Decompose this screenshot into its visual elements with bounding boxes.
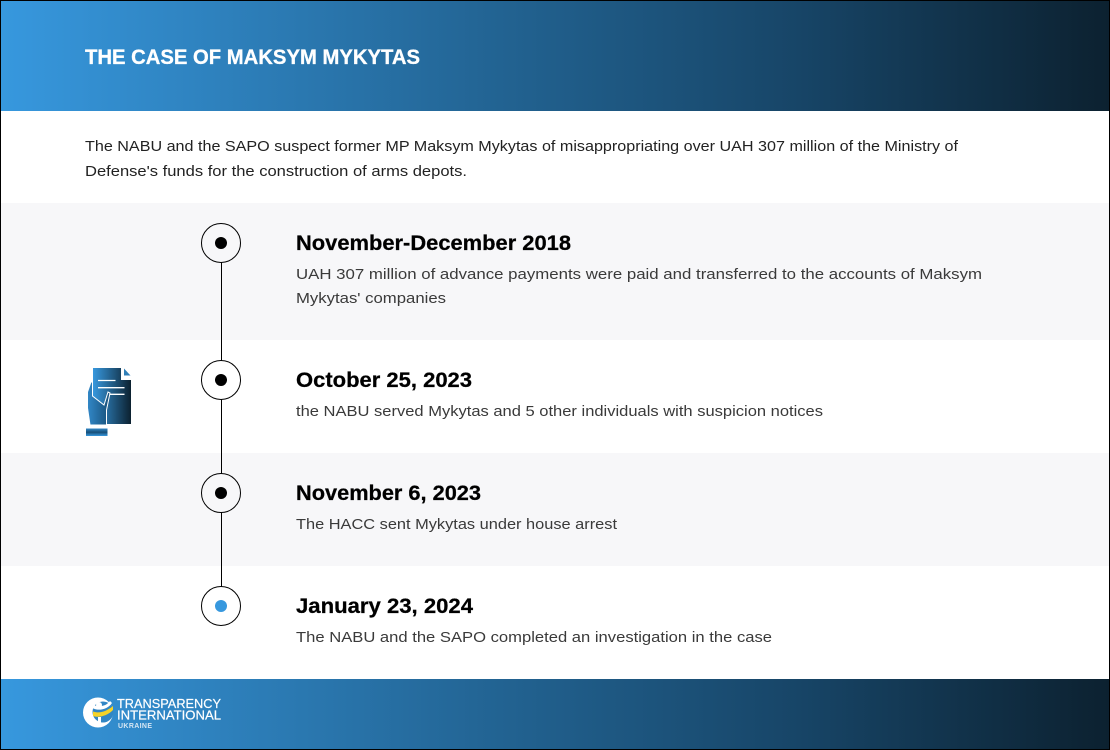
- event 3: November 6, 2023: November 6, 2023: [296, 482, 481, 505]
- panel: row band November-December 2018: [1, 203, 1109, 340]
- timeline marker 4: [202, 586, 240, 626]
- intro text: The NABU and the SAPO suspect former MP Maksym Mykytas of misappropriating over UAH 307 million of the Ministry of: [85, 138, 959, 155]
- event 2: October 25, 2023: the NABU served Mykytas and 5 other individuals with suspicion notices: [296, 403, 823, 420]
- panel: row band November 6, 2023: [1, 453, 1109, 566]
- timeline marker 1: [202, 224, 240, 262]
- event 3: November 6, 2023: The HACC sent Mykytas under house arrest: [296, 516, 618, 533]
- logo: Transparency International Ukraine: [83, 696, 221, 730]
- timeline marker 2: [202, 360, 240, 400]
- icon: hand holding document: [86, 368, 131, 436]
- event 1: November-December 2018: [296, 232, 982, 307]
- title: THE CASE OF MAKSYM MYKYTAS: [85, 46, 420, 69]
- timeline marker 3: [202, 474, 240, 512]
- timeline connector line: [220, 262, 222, 587]
- logo: Transparency International Ukraine: INTERNATIONAL: [117, 708, 221, 722]
- event 1: November-December 2018: UAH 307 million of advance payments were paid and transferred to the accounts of Maksym: [296, 266, 982, 283]
- event 4: January 23, 2024: The NABU and the SAPO completed an investigation in the case: [296, 629, 772, 646]
- event 2: October 25, 2023: [296, 369, 823, 420]
- panel: footer banner: [1, 679, 1109, 749]
- event 4: January 23, 2024: [296, 595, 772, 646]
- event 4: January 23, 2024: January 23, 2024: [296, 595, 473, 618]
- logo: Transparency International Ukraine: TRANSPARENCY: [117, 696, 221, 711]
- event 2: October 25, 2023: October 25, 2023: [296, 369, 472, 392]
- panel: header banner: [1, 1, 1109, 111]
- intro text: [85, 138, 959, 180]
- event 1: November-December 2018: November-December 2018: [296, 232, 571, 255]
- event 1: November-December 2018: Mykytas' companies: [296, 290, 446, 307]
- event 3: November 6, 2023: [296, 482, 618, 533]
- intro text: Defense's funds for the construction of arms depots.: [85, 163, 467, 180]
- logo: Transparency International Ukraine: UKRAINE: [118, 723, 152, 730]
